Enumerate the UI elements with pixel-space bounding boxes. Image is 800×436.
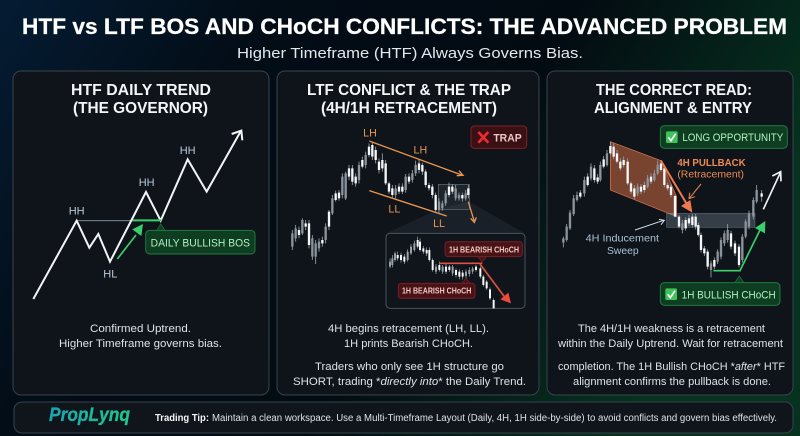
inset: 1H bearish CHoCH — [386, 233, 525, 308]
badge: daily bullish BOS: DAILY BULLISH BOS — [151, 238, 250, 250]
heading: LTF conflict: LTF CONFLICT & THE TRAP — [307, 82, 511, 99]
tip text: Trading Tip: — [155, 413, 209, 424]
heading: HTF daily trend: (THE GOVERNOR) — [73, 100, 208, 117]
heading: the correct read: THE CORRECT READ: — [596, 82, 752, 99]
chart: 4H retracement candles: LL — [388, 204, 400, 216]
panel: HTF daily trend — [13, 71, 269, 395]
inset: 1H bearish CHoCH: 1H BEARISH CHoCH — [402, 286, 471, 296]
heading: the correct read — [594, 82, 753, 117]
chart: alignment candles: Sweep — [607, 246, 639, 257]
chart: daily uptrend zigzag: HH — [180, 145, 196, 157]
chart: 4H retracement candles: LL — [433, 218, 445, 230]
text: panel 3 description: The 4H/1H weakness is a retracement — [578, 323, 765, 335]
text: panel 2 description: SHORT, trading * directly into* the Daily Trend. — [293, 376, 526, 388]
badge: long opportunity: LONG OPPORTUNITY — [682, 132, 784, 144]
text: panel 1 description: Confirmed Uptrend. — [90, 323, 191, 335]
text: panel 2 description — [293, 323, 526, 388]
chart: daily uptrend zigzag: HL — [103, 268, 117, 280]
badge: trap: TRAP — [493, 132, 522, 144]
text: panel 3 description: within the Daily Uptrend. Wait for retracement — [557, 338, 783, 350]
text: panel 3 description: completion. The 1H Bullish CHoCH *after* HTF — [558, 361, 785, 373]
arrow: 1H bullish — [713, 221, 765, 271]
footer: trading tip — [14, 402, 793, 433]
heading: LTF conflict — [307, 82, 511, 117]
arrow: pullback — [661, 161, 701, 213]
heading: LTF conflict: (4H/1H RETRACEMENT) — [321, 100, 497, 117]
heading: HTF daily trend — [71, 82, 211, 117]
chart: alignment candles: 4H PULLBACK — [677, 158, 746, 169]
badge: long opportunity — [660, 126, 787, 148]
badge: 1H bullish CHoCH — [660, 276, 780, 305]
inset: 1H bearish CHoCH: 1H BEARISH CHoCH — [449, 244, 519, 254]
chart: alignment candles: (Retracement) — [677, 170, 744, 181]
heading: HTF daily trend: HTF DAILY TREND — [71, 82, 211, 99]
chart: daily uptrend zigzag — [33, 131, 255, 299]
tip text: Maintain a clean workspace. Use a Multi-Timeframe Layout (Daily, 4H, 1H side-by-side) to avoid conflicts and govern bias effectively. — [212, 413, 777, 424]
chart: alignment candles — [563, 126, 787, 305]
chart: alignment candles: 4H Inducement — [586, 234, 659, 245]
arrow: inducement sweep — [635, 219, 664, 230]
badge: daily bullish BOS — [146, 224, 255, 254]
text: panel 3 description: alignment confirms the pullback is done. — [573, 376, 771, 388]
chart: 4H retracement candles: LH — [414, 145, 427, 157]
text: panel 2 description: 4H begins retracement (LH, LL). — [328, 323, 489, 335]
arrow: bullish continuation — [763, 172, 781, 209]
title: HTF vs LTF BOS AND CHoCH CONFLICTS: THE ADVANCED PROBLEM — [22, 14, 787, 39]
panel: LTF conflict and trap — [277, 71, 539, 395]
badge: 1H bullish CHoCH: 1H BULLISH CHoCH — [682, 290, 776, 302]
chart: daily uptrend zigzag: HH — [69, 205, 85, 217]
heading: the correct read: ALIGNMENT & ENTRY — [594, 100, 753, 117]
trend lines — [369, 141, 476, 222]
subtitle: Higher Timeframe (HTF) Always Governs Bias. — [237, 45, 583, 62]
text: panel 3 description — [557, 323, 785, 388]
text: panel 1 description — [59, 323, 222, 350]
chart: 4H retracement candles — [292, 126, 527, 308]
text: panel 2 description: 1H prints Bearish CHoCH. — [344, 338, 473, 350]
panel: the correct read — [547, 71, 793, 395]
badge: trap — [471, 126, 527, 148]
text: panel 2 description: Traders who only see 1H structure go — [315, 361, 504, 373]
brand: PropLynq: PropLynq — [49, 405, 130, 426]
chart: 4H retracement candles: LH — [363, 127, 377, 139]
chart: daily uptrend zigzag: HH — [139, 177, 155, 189]
text: panel 1 description: Higher Timeframe governs bias. — [59, 338, 222, 350]
